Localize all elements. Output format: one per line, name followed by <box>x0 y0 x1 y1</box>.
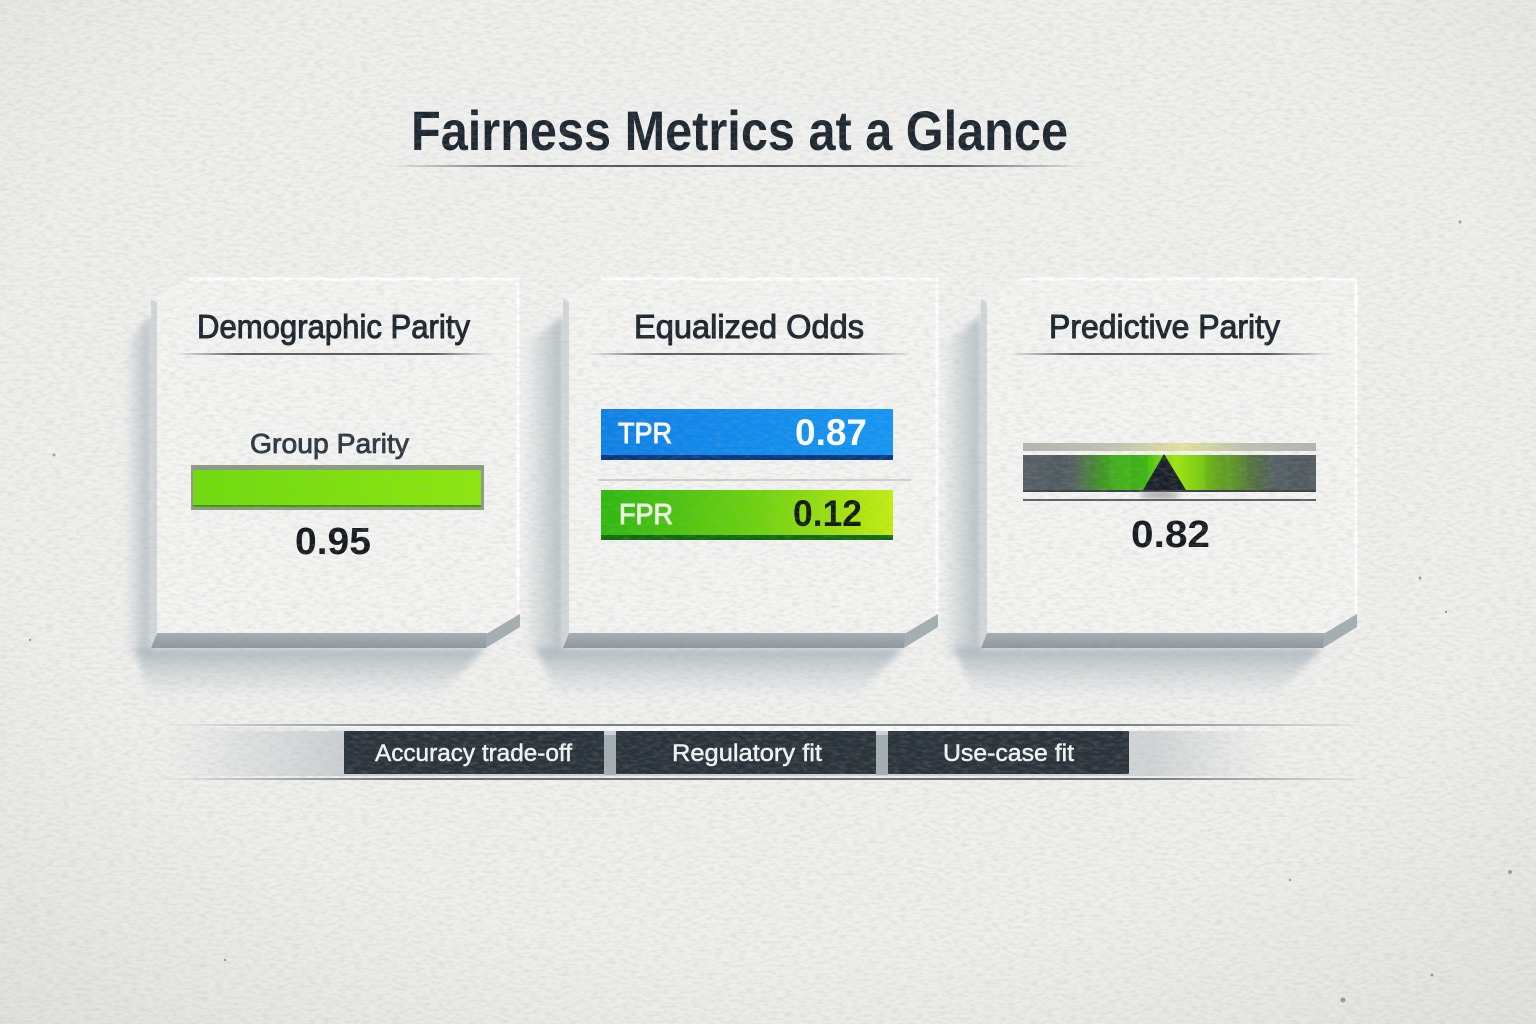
card body <box>151 278 520 648</box>
bar: TPR: 0.87 <box>795 412 867 453</box>
bar: group parity <box>191 465 484 510</box>
bar: TPR <box>601 409 893 460</box>
card body <box>563 278 938 648</box>
gauge <box>1023 443 1316 501</box>
paper specks <box>29 220 1512 1002</box>
heading rule <box>587 353 913 355</box>
panel: Predictive Parity <box>981 278 1357 648</box>
tag: Accuracy trade-off <box>344 731 604 774</box>
panel: Equalized Odds <box>563 278 938 648</box>
footer tag bar <box>155 724 1375 780</box>
card shadows <box>125 315 1323 698</box>
bar: FPR <box>601 490 893 540</box>
card body <box>981 278 1357 648</box>
heading rule <box>175 353 495 355</box>
bar: FPR: 0.12 <box>793 493 862 534</box>
tag: Use-case fit: Use-case fit <box>943 740 1074 767</box>
label: Group Parity: Group Parity <box>250 428 409 459</box>
tag: Use-case fit <box>888 731 1129 774</box>
bar: FPR: FPR <box>619 499 673 531</box>
heading: Equalized Odds: Equalized Odds <box>634 308 864 345</box>
bar: TPR: TPR <box>618 418 672 450</box>
tag separators <box>604 735 888 775</box>
heading: Predictive Parity: Predictive Parity <box>1049 308 1280 345</box>
value: 0.82: 0.82 <box>1131 514 1210 556</box>
panel: Demographic Parity <box>151 278 520 648</box>
value: 0.95: 0.95 <box>295 521 371 563</box>
heading rule <box>1008 353 1332 355</box>
marker triangle <box>1143 454 1186 490</box>
title: Fairness Metrics at a Glance <box>411 99 1068 162</box>
tag: Regulatory fit <box>616 731 876 774</box>
divider <box>598 479 911 481</box>
tag: Regulatory fit: Regulatory fit <box>672 740 822 767</box>
heading: Demographic Parity: Demographic Parity <box>197 308 470 345</box>
tag: Accuracy trade-off: Accuracy trade-off <box>375 740 572 767</box>
